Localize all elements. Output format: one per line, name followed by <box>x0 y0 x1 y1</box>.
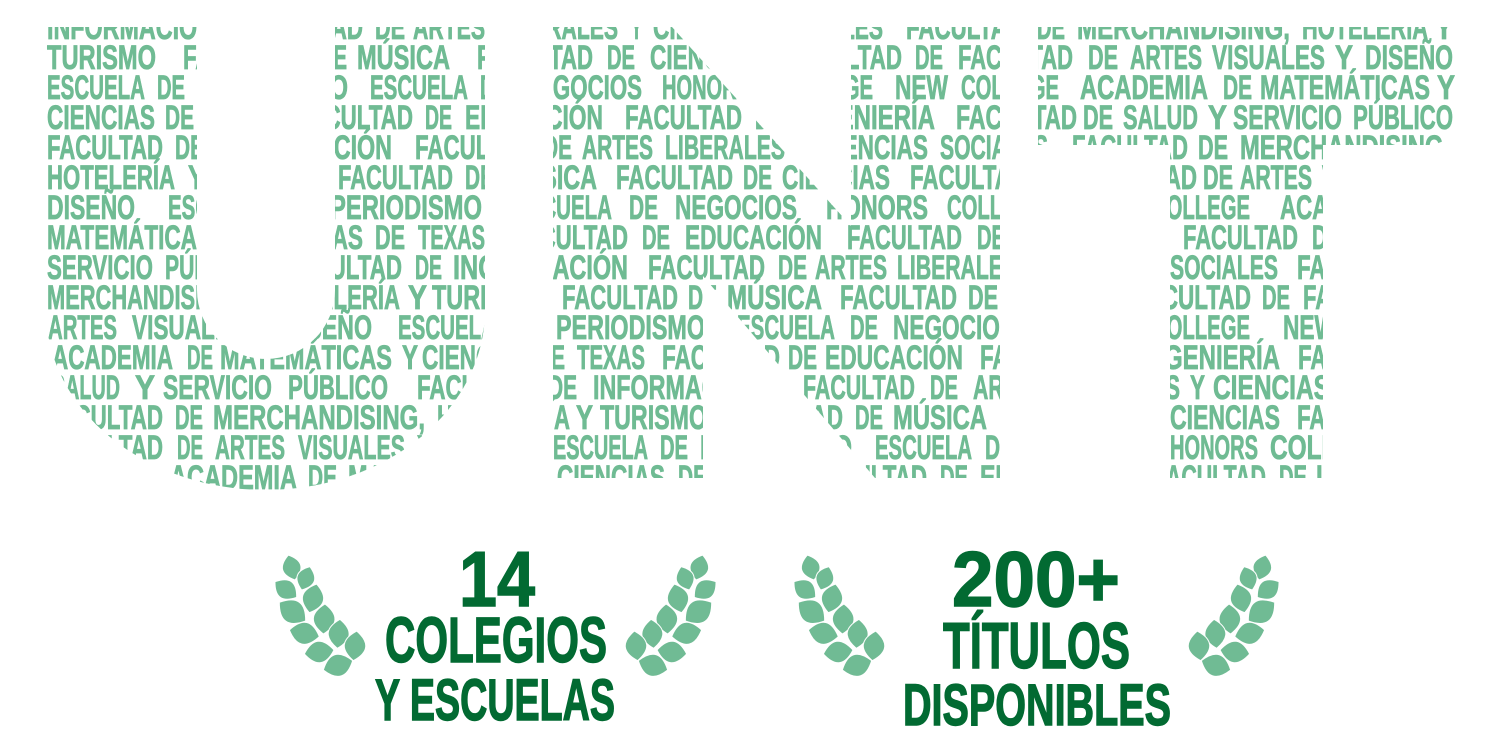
letter U: HOTELERÍA <box>47 159 175 197</box>
letter T: COLLEGE <box>1152 309 1250 347</box>
letter N: Y <box>795 129 810 167</box>
icon: right laurel branch <box>625 555 716 676</box>
letter N: DE <box>850 309 878 347</box>
letter U: DE <box>177 429 203 467</box>
letter T: ACADEMIA <box>1080 69 1208 107</box>
letter T: DE <box>1083 99 1113 137</box>
letter N: FACULTAD <box>415 129 532 167</box>
letter N: CIENCIAS <box>653 9 761 47</box>
letter T: FACULTAD <box>1080 159 1197 197</box>
letter N: DE <box>607 39 635 77</box>
letter N: FACULTAD <box>648 249 765 287</box>
letter U: HOTELERÍA <box>437 399 565 437</box>
letter T: FACULTAD <box>1154 459 1266 497</box>
letter N: MÚSICA <box>893 399 987 437</box>
letter N: DE <box>940 459 968 497</box>
letter U: FACULTAD <box>47 129 163 167</box>
letter T: DE <box>1088 39 1118 77</box>
letter U: SERVICIO <box>163 369 272 407</box>
letter U: Y <box>402 339 418 377</box>
icon: right laurel branch <box>1188 555 1279 676</box>
letter N: SOCIALES <box>940 129 1048 167</box>
letter T: FACULTAD <box>958 39 1073 77</box>
letter T: DE <box>1312 219 1341 257</box>
letter N: DE <box>678 459 707 497</box>
letter U: Y <box>417 429 435 467</box>
letter N: ESCUELA <box>875 429 972 467</box>
letter T: FACULTAD <box>1183 219 1298 257</box>
stat heading: 200+ <box>952 535 1120 623</box>
letter T: Y <box>1208 99 1227 137</box>
letter T: SOCIALES <box>1170 249 1278 287</box>
letter T: FACULTAD <box>1303 279 1418 317</box>
letter N: DE <box>778 249 807 287</box>
letter T: ARTES <box>1240 159 1312 197</box>
icon: left laurel branch <box>275 555 366 676</box>
letter U: SERVICIO <box>47 249 153 287</box>
letter N: INFORMACIÓN <box>593 369 760 407</box>
letter U: ACADEMIA <box>170 459 297 497</box>
letter N: Y <box>576 399 593 437</box>
letter N: DE <box>629 189 658 227</box>
letter N: LIBERALES <box>897 249 1017 287</box>
letter N: FACULTAD <box>906 9 1023 47</box>
letter T: FACULTAD <box>1298 339 1415 377</box>
icon: left laurel branch <box>794 555 885 676</box>
letter N: EDUCACIÓN <box>465 99 603 137</box>
letter U: Y <box>135 369 155 407</box>
letter U: TEXAS <box>205 99 280 137</box>
letter N: COLLEGE <box>947 189 1045 227</box>
letter U: ESCUELA <box>370 69 468 107</box>
letter N: DE <box>688 279 717 317</box>
letter U: INFORMACIÓN <box>47 9 214 47</box>
letter U: FACULTAD <box>46 399 163 437</box>
letter U: CIENCIAS <box>422 339 530 377</box>
letter U: FACULTAD <box>338 159 453 197</box>
letter N: DE <box>788 339 817 377</box>
letter N: MÚSICA <box>505 159 597 197</box>
letter N: NEGOCIOS <box>893 309 1015 347</box>
letter T: ACADEMIA <box>1280 189 1400 227</box>
letter N: CIENCIAS <box>650 39 758 77</box>
letter N: DE <box>855 399 883 437</box>
letter T: FACULTAD <box>1297 399 1414 437</box>
stat heading <box>375 535 615 733</box>
letter T: Y <box>1435 9 1453 47</box>
stat heading: DISPONIBLES <box>903 673 1171 738</box>
letter T: FACULTAD <box>1133 279 1251 317</box>
letter N: ARTES <box>815 249 887 287</box>
letter U: VISUALES <box>132 309 245 347</box>
stat heading: 14 <box>459 535 535 623</box>
letter T: Y <box>1190 369 1205 407</box>
stat heading: Y ESCUELAS <box>375 668 615 733</box>
letter N: ESCUELA <box>737 309 835 347</box>
letter N: DE <box>930 369 958 407</box>
UNT lettermark filled with college names <box>46 9 1456 497</box>
letter T: SALUD <box>1123 99 1198 137</box>
letter N: ESCUELA <box>553 429 648 467</box>
letter U: DE <box>165 99 194 137</box>
letter U: DE <box>308 459 337 497</box>
letter N: NEGOCIOS <box>522 69 642 107</box>
letter U: HOTELERÍA <box>272 279 400 317</box>
stat heading: COLEGIOS <box>385 604 607 676</box>
letter U: FACULTAD <box>183 39 300 77</box>
letter N: PERIODISMO <box>556 309 705 347</box>
letter N: DE <box>968 279 998 317</box>
letter N: DE <box>548 369 577 407</box>
letter T: MERCHANDISING, <box>1077 9 1290 47</box>
letter N: INGENIERÍA <box>795 99 935 137</box>
letter U: VISUALES <box>298 429 405 467</box>
letter T: COLLEGE <box>1270 429 1388 467</box>
letter N: DE <box>755 99 783 137</box>
letter T: SERVICIO <box>1233 99 1342 137</box>
letter T: HOTELERÍA <box>1302 9 1428 47</box>
letter U: DE <box>375 219 405 257</box>
letter T: INGENIERÍA <box>1140 339 1280 377</box>
letter N: HONORS <box>826 189 928 227</box>
letter U: PERIODISMO <box>197 69 348 107</box>
stat heading: TÍTULOS <box>943 609 1130 682</box>
letter U: INGENIERÍA <box>453 249 600 287</box>
letter U: CIENCIAS <box>255 219 363 257</box>
letter T: VISUALES <box>1212 39 1325 77</box>
letter N: ARTES <box>973 369 1045 407</box>
letter N: COLLEGE <box>775 69 873 107</box>
letter N: HOTELERÍA <box>442 399 570 437</box>
letter U: FACULTAD <box>285 249 402 287</box>
letter N: DE <box>915 39 943 77</box>
letter N <box>553 27 1000 478</box>
letter U: ACADEMIA <box>52 339 173 377</box>
letter U: ESCUELA <box>47 69 145 107</box>
letter U: DE <box>415 249 442 287</box>
letter U: ESCUELA <box>168 189 266 227</box>
letter U: MATEMÁTICAS <box>348 459 520 497</box>
letter N: CIENCIAS <box>820 129 928 167</box>
letter U: DISEÑO <box>47 189 135 227</box>
letter U: PÚBLICO <box>288 369 388 407</box>
letter U: FACULTAD <box>296 99 413 137</box>
letter N: DE <box>977 219 1005 257</box>
letter U: FACULTAD <box>46 429 163 467</box>
letter N: TEXAS <box>577 339 645 377</box>
letter U: Y <box>188 159 205 197</box>
letter T: DE <box>1279 459 1307 497</box>
letter U: DE <box>318 39 347 77</box>
letter U: DE <box>175 399 203 437</box>
letter U: DE <box>175 129 204 167</box>
letter N: FACULTAD <box>562 279 678 317</box>
letter N: FACULTAD <box>616 159 733 197</box>
letter U: ESCUELA <box>398 309 496 347</box>
letter N: FACULTAD <box>956 99 1077 137</box>
letter U <box>47 27 485 490</box>
letter T: DE <box>1262 279 1290 317</box>
letter N: DE <box>743 159 772 197</box>
letter N: NEW <box>895 69 949 107</box>
letter U: FACULTAD <box>417 369 534 407</box>
letter N: MÚSICA <box>727 279 822 317</box>
letter N: FACULTAD <box>477 39 593 77</box>
letter U: MÚSICA <box>357 39 450 77</box>
letter U: FACULTAD <box>415 129 532 167</box>
letter T: SOCIALES <box>940 129 1048 167</box>
letter N: DE <box>985 429 1014 467</box>
letter T: Y <box>1335 39 1353 77</box>
letter U: MERCHANDISING, <box>47 279 240 317</box>
letter U: EDUCACIÓN <box>465 99 603 137</box>
letter T: FACULTAD <box>960 99 1077 137</box>
letter T: HONORS <box>1170 429 1258 467</box>
letter T: CIENCIAS <box>1170 399 1280 437</box>
letter U: TEXAS <box>418 219 485 257</box>
letter U: MATEMÁTICAS <box>220 339 392 377</box>
letter T: Y <box>1437 69 1455 107</box>
letter U: MATEMÁTICAS <box>47 219 212 257</box>
letter N: COLLEGE <box>961 69 1059 107</box>
letter U: FACULTAD <box>477 39 593 77</box>
letter U: PERIODISMO <box>330 189 482 227</box>
letter U: SALUD <box>52 369 120 407</box>
letter U: PÚBLICO <box>165 249 260 287</box>
letter T: NEW <box>1283 309 1337 347</box>
letter T: ARTES <box>1130 39 1202 77</box>
letter T: COLLEGE <box>1152 189 1250 227</box>
letter N: FACULTAD <box>662 339 780 377</box>
letter U: DE <box>425 99 452 137</box>
letter N: Y <box>631 9 642 47</box>
letter N: DE <box>660 429 688 467</box>
letter U: ARTES <box>413 9 485 47</box>
letter N: FACULTAD <box>511 219 628 257</box>
stat: 14 colleges and schools <box>275 535 716 733</box>
letter T <box>1038 27 1455 478</box>
letter U: TURISMO <box>432 279 540 317</box>
stat: 200+ degrees available <box>794 535 1279 738</box>
letter U: DE <box>157 69 185 107</box>
letter N: DE <box>543 129 572 167</box>
letter N: SOCIALES <box>775 9 883 47</box>
letter N: INFORMACIÓN <box>460 249 628 287</box>
letter U: DE <box>465 159 494 197</box>
letter N: FACULTAD <box>847 219 962 257</box>
letter N: FACULTAD <box>785 39 902 77</box>
letter U: ARTES <box>48 309 117 347</box>
letter T: VISUALES <box>1322 159 1430 197</box>
letter U: MERCHANDISING, <box>213 399 425 437</box>
letter T: DE <box>1223 69 1252 107</box>
letter N: LIBERALES <box>498 9 618 47</box>
letter N: FACULTAD <box>958 39 1073 77</box>
letter T: FACULTAD <box>1297 249 1414 287</box>
letter N: ESCUELA <box>514 189 612 227</box>
letter U: TURISMO <box>47 39 156 77</box>
letter T: FACULTAD <box>1072 129 1188 167</box>
letter U: DE <box>480 69 508 107</box>
letter N: PERIODISMO <box>700 429 852 467</box>
letter N: EDUCACIÓN <box>980 459 1120 497</box>
letter N: CIENCIAS <box>782 159 890 197</box>
letter U: ARTES <box>215 429 285 467</box>
letter N: FACULTAD <box>726 399 843 437</box>
letter N: TURISMO <box>600 399 707 437</box>
letter N: FACULTAD <box>810 459 927 497</box>
letter T: COLLEGE <box>961 69 1059 107</box>
letter N: FACULTAD <box>910 159 1027 197</box>
letter N: NEGOCIOS <box>675 189 797 227</box>
letter U: DISEÑO <box>283 309 372 347</box>
letter N: EDUCACIÓN <box>825 339 963 377</box>
letter N: FACULTAD <box>625 99 742 137</box>
letter U: DE <box>375 9 405 47</box>
letter U: FACULTAD <box>246 9 363 47</box>
letter U: Y <box>408 279 427 317</box>
letter N: FACULTAD <box>803 369 915 407</box>
letter U: CIENCIAS <box>47 99 155 137</box>
letter N: DE <box>535 339 565 377</box>
letter N: CIENCIAS <box>557 459 665 497</box>
letter N: FACULTAD <box>980 339 1097 377</box>
letter T: CIENCIAS <box>1213 369 1330 407</box>
letter N: FACULTAD <box>840 279 957 317</box>
letter T: SOCIALES <box>1072 369 1180 407</box>
letter N: LIBERALES <box>665 129 785 167</box>
letter N: DE <box>642 219 670 257</box>
letter U: INFORMACIÓN <box>225 129 392 167</box>
letter N: HONORS <box>662 69 750 107</box>
letter T: DISEÑO <box>1365 39 1453 77</box>
letter N: ARTES <box>582 129 653 167</box>
stat heading <box>903 535 1171 738</box>
letter T: DE <box>1203 159 1233 197</box>
letter T: DE <box>1198 129 1228 167</box>
letter U: DE <box>187 339 213 377</box>
letter T: DE <box>1037 9 1065 47</box>
letter N: EDUCACIÓN <box>685 219 822 257</box>
